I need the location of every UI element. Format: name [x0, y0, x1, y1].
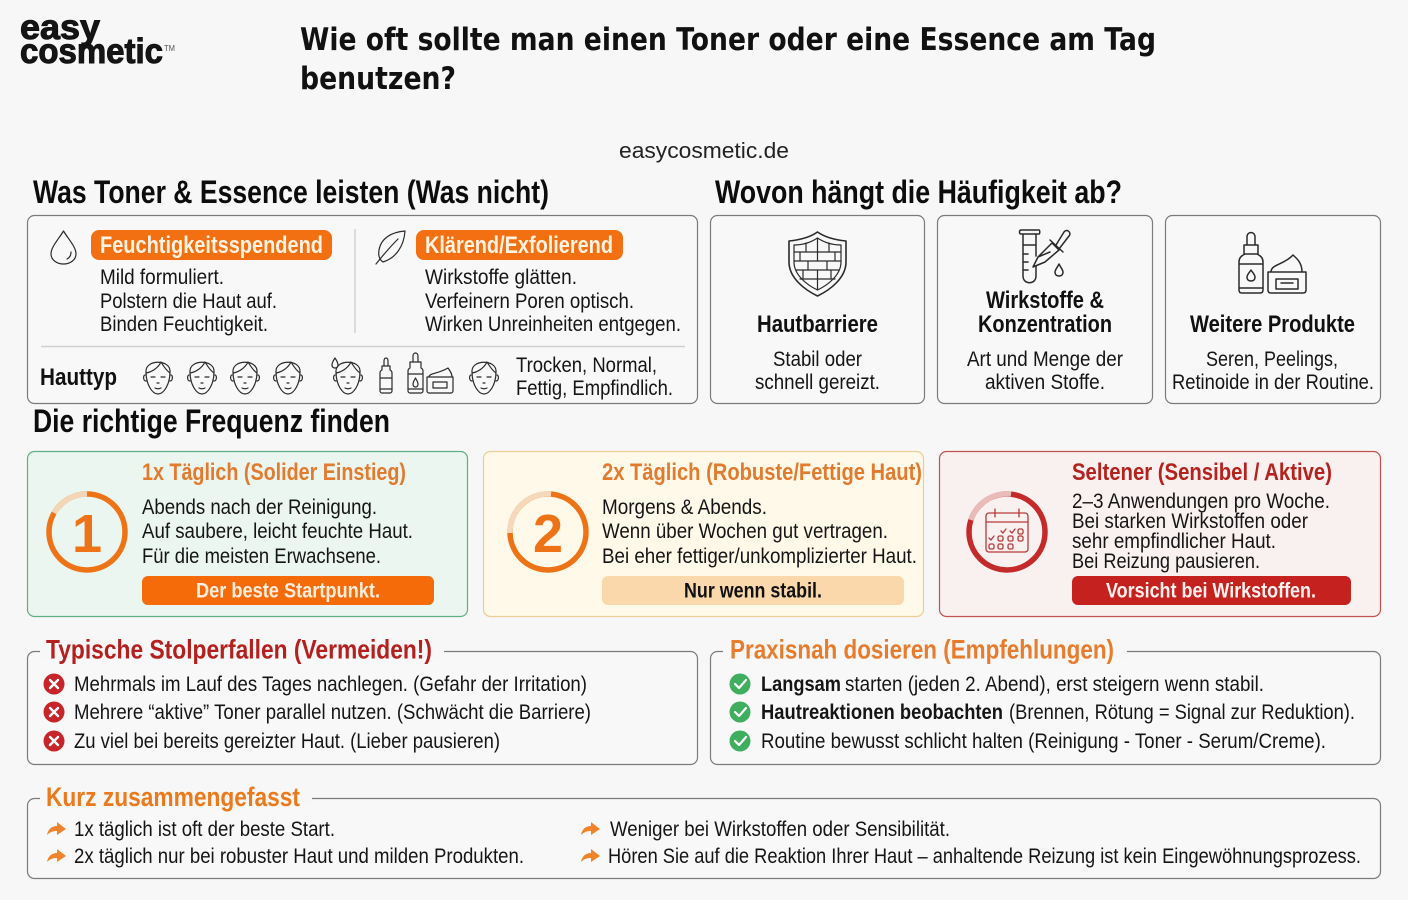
icon: shield [789, 232, 846, 296]
icon: water drop [51, 231, 76, 264]
panel: 2x taeglich [484, 452, 924, 616]
callout [602, 576, 904, 605]
text: 2–3 Anwendungen pro Woche. [1072, 489, 1330, 513]
title: benutzen? [300, 61, 456, 97]
heading: Seltener (Sensibel / Aktive) [1072, 459, 1332, 486]
heading: was toner leisten: Was Toner & Essence leisten (Was nicht) [33, 174, 549, 210]
callout: Der beste Startpunkt. [196, 578, 380, 602]
card: weitere produkte [1166, 216, 1380, 404]
card: wirkstoffe [938, 216, 1152, 404]
title: Wie oft sollte man einen Toner oder eine Essence am Tag [300, 22, 1156, 58]
icon: leaf [376, 231, 405, 264]
icon: bottle and jar [1239, 232, 1306, 293]
title [300, 22, 1156, 97]
text [1072, 489, 1330, 573]
text: Retinoide in der Routine. [1172, 370, 1374, 394]
logo: cosmetic [20, 32, 163, 71]
pill: klaerend: Klärend/Exfolierend [425, 232, 613, 259]
logo: easy [20, 8, 101, 47]
text: Bei eher fettiger/unkomplizierter Haut. [602, 544, 917, 568]
text: Auf saubere, leicht feuchte Haut. [142, 519, 413, 543]
item: Zu viel bei bereits gereizter Haut. (Lieber pausieren) [74, 729, 500, 753]
heading: wovon haengt: Wovon hängt die Häufigkeit ab? [715, 174, 1122, 210]
text: Bei starken Wirkstoffen oder [1072, 509, 1308, 533]
text: Art und Menge der [967, 347, 1123, 371]
heading: Hautbarriere [757, 311, 878, 338]
text [602, 495, 917, 568]
heading: Konzentration [978, 311, 1112, 338]
text [1172, 347, 1374, 394]
item: (Brennen, Rötung = Signal zur Reduktion). [1009, 700, 1355, 724]
ring: calendar [969, 494, 1045, 570]
text: hauttyp [516, 353, 673, 400]
text: aktiven Stoffe. [985, 370, 1105, 394]
item: 2x täglich nur bei robuster Haut und milden Produkten. [74, 844, 524, 868]
callout: Vorsicht bei Wirkstoffen. [1106, 578, 1316, 602]
ring: 2: 2 [533, 504, 563, 564]
callout [142, 576, 434, 605]
item: starten (jeden 2. Abend), erst steigern wenn stabil. [845, 672, 1264, 696]
logo: TM [164, 44, 175, 53]
label: hauttyp: Hauttyp [40, 364, 117, 391]
website: easycosmetic.de [619, 138, 789, 163]
text: feuchtigkeit: Binden Feuchtigkeit. [100, 312, 268, 336]
text: Morgens & Abends. [602, 495, 767, 519]
text: klaerend: Wirkstoffe glätten. [425, 265, 577, 289]
item: 1x täglich ist oft der beste Start. [74, 817, 335, 841]
icon: test tube and dropper [1020, 230, 1070, 283]
heading: Weitere Produkte [1190, 311, 1355, 338]
panel: stolperfallen [28, 634, 698, 764]
text: klaerend: Wirken Unreinheiten entgegen. [425, 312, 681, 336]
item: Mehrmals im Lauf des Tages nachlegen. (Gefahr der Irritation) [74, 672, 587, 696]
text: Wenn über Wochen gut vertragen. [602, 519, 888, 543]
item: Routine bewusst schlicht halten (Reinigung - Toner - Serum/Creme). [761, 729, 1326, 753]
item [730, 700, 1355, 724]
heading: Wirkstoffe & [986, 287, 1104, 314]
panel: kurz zusammengefasst [28, 782, 1380, 878]
ring: 1: 1 [72, 504, 102, 564]
text: hauttyp: Trocken, Normal, [516, 353, 657, 377]
heading: 1x Täglich (Solider Einstieg) [142, 459, 406, 486]
text [142, 495, 413, 568]
heading: 2x Täglich (Robuste/Fettige Haut) [602, 459, 922, 486]
text: Für die meisten Erwachsene. [142, 544, 381, 568]
item: Hautreaktionen beobachten [761, 700, 1003, 724]
text: klaerend: Verfeinern Poren optisch. [425, 289, 634, 313]
card: hautbarriere [710, 216, 924, 404]
text: klaerend [425, 265, 681, 336]
text: schnell gereizt. [755, 370, 880, 394]
ring: 1 [49, 494, 125, 570]
heading: Kurz zusammengefasst [46, 782, 300, 812]
pill: feuchtigkeitsspendend: Feuchtigkeitsspendend [100, 232, 323, 259]
panel: seltener [940, 452, 1380, 616]
logo [20, 8, 175, 71]
panel: leistungen [28, 216, 698, 404]
heading: Typische Stolperfallen (Vermeiden!) [46, 634, 432, 664]
text: Seren, Peelings, [1206, 347, 1338, 371]
text: sehr empfindlicher Haut. [1072, 529, 1276, 553]
callout: Nur wenn stabil. [684, 578, 822, 602]
panel: praxisnah [710, 634, 1380, 764]
heading: Praxisnah dosieren (Empfehlungen) [730, 634, 1114, 664]
text [755, 347, 880, 394]
item: Langsam [761, 672, 841, 696]
text [967, 347, 1123, 394]
icon: skin type faces [144, 358, 498, 394]
text: feuchtigkeit: Mild formuliert. [100, 265, 224, 289]
item: Weniger bei Wirkstoffen oder Sensibilität. [610, 817, 950, 841]
text: feuchtigkeit [100, 265, 277, 336]
heading [978, 287, 1112, 338]
item: Mehrere “aktive” Toner parallel nutzen. (Schwächt die Barriere) [74, 700, 591, 724]
panel: 1x taeglich [28, 452, 468, 616]
heading: frequenz: Die richtige Frequenz finden [33, 403, 390, 439]
text: hauttyp: Fettig, Empfindlich. [516, 376, 673, 400]
icon: bottles and jar [380, 353, 453, 393]
ring: 2 [510, 494, 586, 570]
text: feuchtigkeit: Polstern die Haut auf. [100, 289, 277, 313]
text: Abends nach der Reinigung. [142, 495, 377, 519]
text: Stabil oder [773, 347, 862, 371]
text: Bei Reizung pausieren. [1072, 549, 1260, 573]
